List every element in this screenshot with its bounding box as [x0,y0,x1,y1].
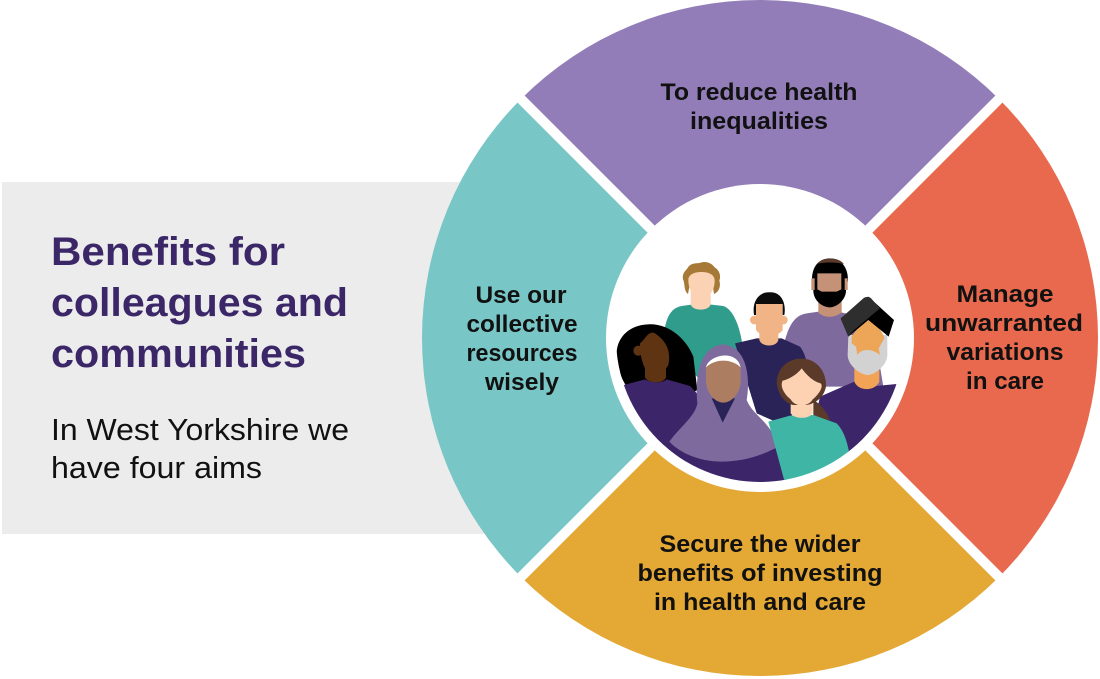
person: woman in hijab [669,344,778,462]
intro text: have four aims [51,450,262,485]
aim label: unwarranted variations [925,281,1083,395]
illustration: group of people [617,258,897,493]
aim label: wider benefits [638,531,882,616]
aim label: reduce health inequalities: inequalities [690,108,828,135]
person: curly hair man [663,262,743,380]
aim label: collective resources [466,282,578,396]
intro text [51,412,349,485]
person: woman with black hair [617,324,700,473]
intro text: In West Yorkshire we [51,412,349,447]
segment: amber [521,338,999,676]
person: front body purple [668,448,786,482]
aim label: collective resources: resources [466,340,578,367]
panel: intro background [2,182,502,534]
wheel of four aims [422,0,1098,676]
aim label: unwarranted variations: in care [966,368,1044,395]
aim label: collective resources: Use our [476,282,566,309]
aim label: collective resources: collective [466,311,578,338]
segment: teal [422,99,760,577]
centre white circle [606,184,914,492]
heading [51,230,348,376]
person: man with turban [813,297,897,453]
segment: purple [521,0,999,338]
person: bearded man [785,258,883,387]
aim label: unwarranted variations: Manage [956,281,1054,308]
aim label: wider benefits: Secure the wider [660,531,860,558]
aim label: reduce health inequalities [660,79,858,135]
aim label: unwarranted variations: unwarranted [925,310,1083,337]
aim label: unwarranted variations: variations [946,339,1064,366]
person: navy top man [735,292,808,427]
heading: colleagues and [51,281,348,325]
aim label: reduce health inequalities: To reduce health [660,79,858,106]
heading: Benefits for [51,230,285,274]
heading: communities [51,332,306,376]
person: girl with ponytail [768,359,849,481]
segment: red [760,99,1098,577]
aim label: wider benefits: in health and care [654,589,866,616]
aim label: wider benefits: benefits of investing [638,560,882,587]
aim label: collective resources: wisely [484,369,560,396]
